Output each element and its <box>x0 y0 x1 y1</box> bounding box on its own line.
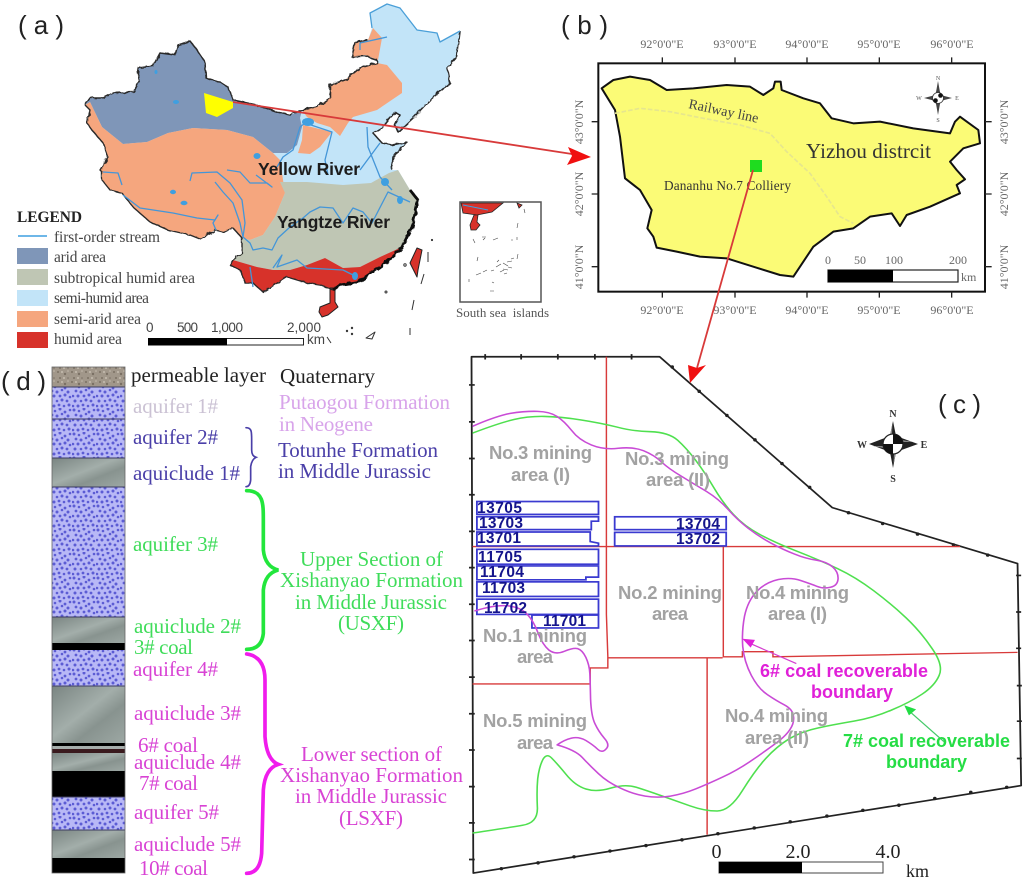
legend: semi-humid area <box>54 290 149 307</box>
layer labels: top <box>131 363 376 388</box>
stratigraphic column <box>52 367 125 873</box>
label: South sea islands: South sea islands <box>456 305 549 320</box>
compass c: W <box>857 440 867 451</box>
Totunhe Formation group: aquifer 2# <box>133 425 218 449</box>
working face numbers: 11702 <box>484 600 527 617</box>
Totunhe Formation group <box>133 425 438 485</box>
scale bar a: 0 <box>146 320 154 335</box>
longitude labels bottom: 93°0'0"E <box>713 303 757 317</box>
working face numbers: 11705 <box>478 549 522 566</box>
working face numbers: 13705 <box>477 500 522 517</box>
label: Railway line: Railway line <box>687 97 760 127</box>
arid area <box>85 41 302 153</box>
leader arrow 7# <box>910 712 944 742</box>
mining area labels: No.4 mining <box>746 582 849 603</box>
label: 7# coal recoverable boundary: boundary <box>886 752 967 772</box>
scale bar a <box>146 320 325 347</box>
label: Yangtze River: Yangtze River <box>277 212 390 232</box>
legend: arid area <box>54 249 106 266</box>
working face numbers: 13701 <box>477 530 521 547</box>
mining area labels: area <box>517 646 554 667</box>
legend: subtropical humid area <box>54 270 195 287</box>
Lower section of Xishanyao group <box>133 657 464 880</box>
label: (b): ( b ) <box>561 10 608 40</box>
scale bar a: km <box>307 332 325 347</box>
compass c: N <box>889 409 897 420</box>
label: 6# coal recoverable boundary: 6# coal recoverable <box>760 661 928 681</box>
Lower section of Xishanyao group: aquifer 5# <box>134 800 220 824</box>
legend <box>17 209 195 348</box>
Totunhe Formation group: aquiclude 1# <box>133 461 240 485</box>
latitude labels left: 43°0'0"N <box>572 99 586 144</box>
compass b: S <box>936 118 940 124</box>
panel: (b) Yizhou district map <box>561 10 1011 317</box>
arrow: from (a) to (b) <box>233 102 591 165</box>
longitude labels top: 96°0'0"E <box>930 37 974 51</box>
latitude labels right: 42°0'0"N <box>997 171 1011 216</box>
humid area <box>230 247 402 292</box>
national border <box>85 31 460 292</box>
legend: semi-arid area <box>54 311 141 328</box>
Lower section of Xishanyao group: aquiclude 3# <box>134 701 242 725</box>
mining area division lines <box>473 357 1018 835</box>
working face numbers: 13702 <box>676 531 720 548</box>
longitude labels bottom: 94°0'0"E <box>785 303 829 317</box>
legend: first-order stream <box>54 229 160 246</box>
scale bar b: 100 <box>885 253 903 267</box>
working face numbers: 13703 <box>479 515 523 532</box>
scale bar b: 200 <box>949 253 967 267</box>
Totunhe Formation group: Totunhe Formation <box>278 438 438 462</box>
mine boundary <box>472 357 1021 873</box>
map frame with Yizhou district <box>592 57 992 298</box>
mining area labels: No.4 mining <box>725 705 828 726</box>
label: 6# coal recoverable boundary <box>760 661 928 702</box>
Upper Section of Xishanyao group: aquiclude 2# <box>134 614 242 638</box>
mining area labels <box>483 442 849 753</box>
latitude labels left: 42°0'0"N <box>572 171 586 216</box>
scale bar c <box>712 841 929 881</box>
label: 7# coal recoverable boundary <box>843 731 1010 772</box>
scale bar c: 4.0 <box>876 841 900 863</box>
Lower section of Xishanyao group: aquifer 4# <box>133 657 218 681</box>
panel: (a) China climate map <box>17 4 549 348</box>
colliery location marker <box>750 160 762 172</box>
latitude labels right: 43°0'0"N <box>997 99 1011 144</box>
compass c: E <box>921 440 928 451</box>
label: (c): ( c ) <box>938 389 981 419</box>
coastal islands <box>327 239 433 343</box>
scale bar a: 500 <box>177 320 198 335</box>
mining area labels: No.3 mining <box>625 448 729 469</box>
compass c <box>857 409 928 485</box>
label: 7# coal recoverable boundary: 7# coal recoverable <box>843 731 1010 751</box>
Putaogou Formation group <box>133 390 450 436</box>
Putaogou Formation group: in Neogene <box>279 412 373 436</box>
scale bar b: 0 <box>825 253 831 267</box>
working face numbers: 13704 <box>676 516 720 533</box>
longitude labels top <box>640 37 974 51</box>
Lower section of Xishanyao group: Xishanyao Formation <box>280 763 464 787</box>
scale bar b: 50 <box>854 253 866 267</box>
longitude labels bottom: 92°0'0"E <box>640 303 684 317</box>
semi-humid area <box>85 4 460 292</box>
longitude labels bottom <box>640 303 974 317</box>
Putaogou Formation group: Putaogou Formation <box>279 390 450 414</box>
working face numbers: 11704 <box>480 564 524 581</box>
layer labels: top: Quaternary <box>280 364 376 388</box>
scale bar b: km <box>961 270 977 284</box>
subtropical humid area <box>233 170 418 270</box>
panel: (c) mining area map <box>469 354 1022 881</box>
Totunhe Formation group: in Middle Jurassic <box>278 459 431 483</box>
mining map linework <box>469 354 1022 873</box>
longitude labels top: 92°0'0"E <box>640 37 684 51</box>
braces <box>246 428 278 873</box>
compass c: S <box>890 474 896 485</box>
label: Yellow River: Yellow River <box>258 159 360 179</box>
6# coal recoverable boundary curve <box>473 411 838 797</box>
mining area labels: No.2 mining <box>618 582 722 603</box>
panel: (d) stratigraphic column <box>1 363 464 880</box>
Xinjiang study region (yellow) <box>204 93 233 117</box>
longitude labels bottom: 96°0'0"E <box>930 303 974 317</box>
scale bar a: 2,000 <box>287 320 321 335</box>
scale bar c: km <box>906 861 929 881</box>
mining area labels: area (I) <box>511 464 570 485</box>
Putaogou Formation group: aquifer 1# <box>133 394 218 418</box>
compass b <box>916 76 959 124</box>
Lower section of Xishanyao group: 7# coal <box>139 771 198 795</box>
arrow: from (b) to (c) <box>688 170 753 383</box>
China climate zone regions <box>85 4 460 343</box>
mining area labels: area (I) <box>768 603 827 624</box>
scale bar c: 0 <box>712 841 722 863</box>
longitude labels bottom: 95°0'0"E <box>857 303 901 317</box>
Lower section of Xishanyao group: 6# coal <box>138 733 198 757</box>
label: (a): ( a ) <box>18 10 64 40</box>
mining area labels: area (II) <box>646 469 710 490</box>
working face numbers <box>477 500 720 630</box>
Lower section of Xishanyao group: (LSXF) <box>339 806 403 830</box>
longitude labels top: 94°0'0"E <box>785 37 829 51</box>
Lower section of Xishanyao group: in Middle Jurassic <box>295 784 447 808</box>
layer labels: top: permeable layer <box>131 363 266 387</box>
Upper Section of Xishanyao group: in Middle Jurassic <box>295 590 447 614</box>
latitude labels right: 41°0'0"N <box>997 244 1011 289</box>
scale bar c: 2.0 <box>786 841 810 863</box>
mining area labels: area <box>517 732 554 753</box>
Lower section of Xishanyao group: aquiclude 5# <box>134 832 242 856</box>
legend: humid area <box>54 331 122 348</box>
compass b: E <box>955 96 959 102</box>
label: Dananhu No.7 Colliery: Dananhu No.7 Colliery <box>664 178 791 193</box>
latitude labels left: 41°0'0"N <box>572 244 586 289</box>
legend: LEGEND <box>17 209 82 226</box>
inset: South sea islands <box>460 202 541 302</box>
scale bar a: 1,000 <box>211 320 243 335</box>
latitude labels left <box>572 99 586 289</box>
Lower section of Xishanyao group: aquiclude 4# <box>134 750 242 774</box>
7# coal recoverable boundary curve <box>473 416 940 833</box>
longitude labels top: 95°0'0"E <box>857 37 901 51</box>
working faces <box>477 502 726 628</box>
label: (d): ( d ) <box>1 366 46 396</box>
longitude labels top: 93°0'0"E <box>713 37 757 51</box>
working face numbers: 11703 <box>482 580 525 597</box>
Upper Section of Xishanyao group: Xishanyao Formation <box>280 568 464 592</box>
mining area labels: area <box>652 603 689 624</box>
label: Yizhou distrcit: Yizhou distrcit <box>806 139 931 163</box>
rivers <box>103 37 410 287</box>
label: 6# coal recoverable boundary: boundary <box>811 682 893 702</box>
Upper Section of Xishanyao group: Upper Section of <box>300 547 443 571</box>
scale bar b <box>825 253 977 284</box>
Lower section of Xishanyao group: Lower section of <box>301 742 442 766</box>
working face numbers: 11701 <box>543 613 586 630</box>
leader arrow 6# <box>750 643 796 664</box>
mining area labels: No.1 mining <box>483 625 587 646</box>
mining area labels: No.3 mining <box>489 442 592 463</box>
Lower section of Xishanyao group: 10# coal <box>139 856 208 880</box>
semi-arid area <box>85 102 285 240</box>
latitude labels right <box>997 99 1011 289</box>
mining area labels: No.5 mining <box>483 710 587 731</box>
Upper Section of Xishanyao group: (USXF) <box>338 611 404 635</box>
compass b: W <box>916 96 922 102</box>
compass b: N <box>936 76 941 82</box>
Upper Section of Xishanyao group: 3# coal <box>134 635 193 659</box>
Upper Section of Xishanyao group <box>133 532 464 659</box>
mining area labels: area (II) <box>745 727 809 748</box>
Upper Section of Xishanyao group: aquifer 3# <box>133 532 218 556</box>
